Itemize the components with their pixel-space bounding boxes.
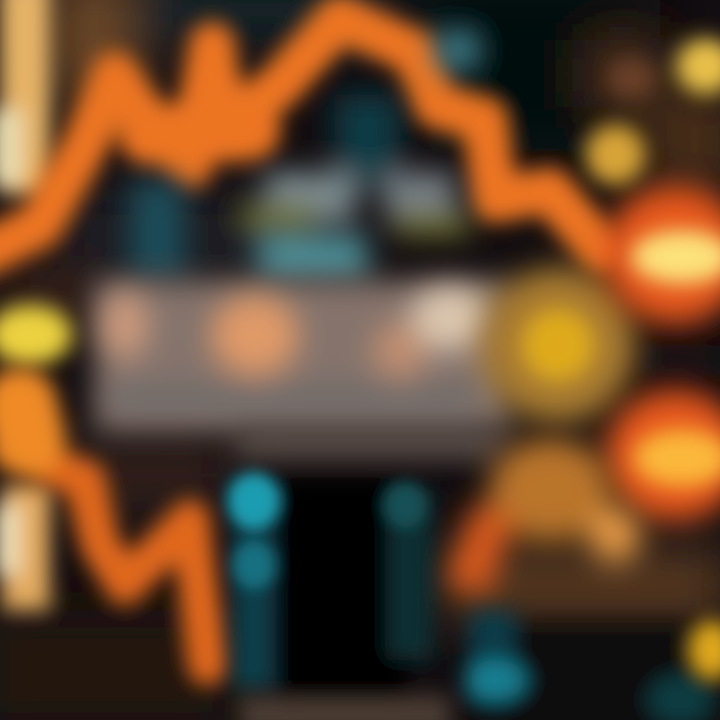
lower left orange line [10, 405, 208, 665]
upper orange line chart [0, 18, 600, 255]
yellow light bottom right [688, 620, 720, 680]
left pale strips [0, 0, 50, 610]
yellow lights [0, 38, 720, 365]
bottom right teal [240, 610, 720, 720]
right glow upper [603, 185, 720, 325]
dark central column with teal lights [228, 473, 433, 710]
gold coin [480, 267, 636, 423]
right glow lower [605, 389, 720, 521]
lower right amber coin and line [465, 438, 641, 590]
central gray panel [95, 280, 510, 459]
teal and gray top panels [130, 30, 480, 280]
